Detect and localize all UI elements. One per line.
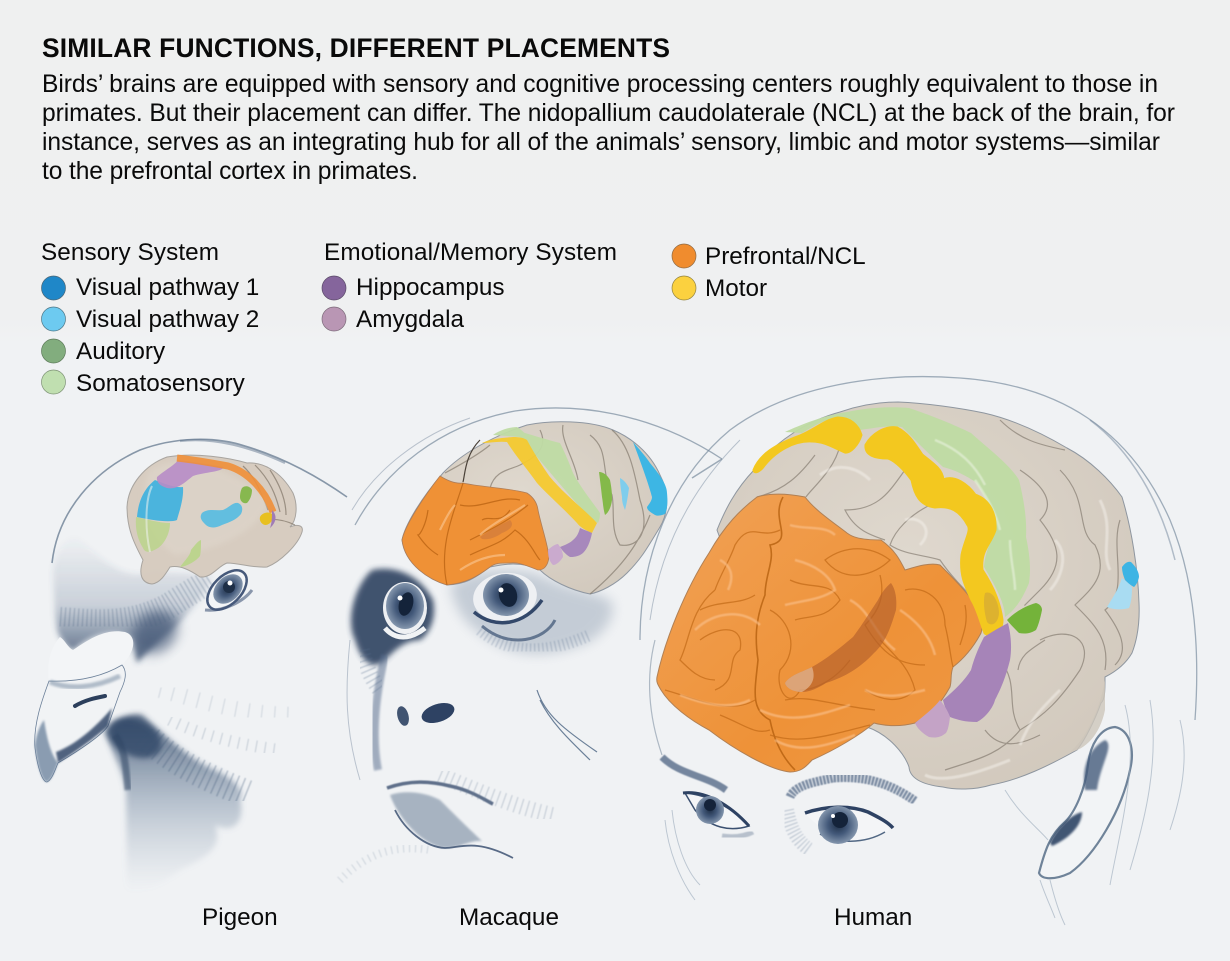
human right eye [787, 806, 893, 850]
hippocampus [157, 460, 224, 488]
somatosensory small [180, 540, 201, 567]
legend: emotional/memory system: Emotional/Memory System [324, 239, 617, 266]
macaque left eye [383, 582, 427, 637]
legend: prefrontal and motor [672, 243, 866, 302]
gyri lines [757, 420, 1122, 770]
legend: emotional/memory system: Amygdala [356, 306, 465, 333]
visual pathway 1 [633, 442, 667, 516]
hippocampus [943, 623, 1011, 722]
illustration: human face sketch [640, 377, 1197, 925]
visual pathway blue [137, 480, 183, 521]
visual pathway 2 [620, 478, 629, 510]
motor [260, 513, 273, 525]
illustration: macaque face sketch [340, 408, 722, 880]
visual pathway 2 [1107, 578, 1132, 609]
somatosensory [493, 427, 600, 523]
human ear [1039, 727, 1132, 878]
somatosensory [785, 407, 1030, 617]
auditory [599, 472, 612, 515]
legend: sensory system: Visual pathway 2 [76, 306, 259, 333]
title: SIMILAR FUNCTIONS, DIFFERENT PLACEMENTS [42, 33, 670, 63]
macaque left eye patch [351, 569, 434, 665]
macaque muzzle and mouth [340, 640, 597, 880]
prefrontal orange [402, 476, 549, 585]
legend: sensory system: Sensory System [41, 239, 219, 266]
auditory [1007, 603, 1042, 634]
beak [35, 665, 125, 782]
intro text block [42, 71, 1175, 185]
cerebellum folds [243, 465, 295, 525]
macaque nose [395, 699, 457, 727]
human left brow [662, 757, 726, 790]
legend: emotional/memory system: Hippocampus [356, 274, 505, 301]
somatosensory [136, 517, 170, 552]
brain outline [402, 422, 667, 594]
brain outline [127, 455, 302, 584]
intro text block: to the prefrontal cortex in primates. [42, 158, 418, 185]
human brain [657, 402, 1139, 789]
visual pathway 1 [1122, 562, 1139, 587]
human hair strands [665, 700, 1184, 925]
prefrontal arc [177, 458, 273, 512]
translucent cerebellum [1070, 680, 1105, 752]
visual pathway mid [201, 503, 242, 527]
illustration: pigeon head sketch [35, 439, 347, 891]
motor yellow [482, 437, 597, 533]
legend: sensory system: Auditory [76, 338, 166, 365]
species labels: Pigeon [202, 904, 278, 931]
amygdala [915, 700, 950, 738]
legend: sensory system [41, 239, 259, 397]
species labels [202, 904, 912, 931]
overlaid deep structure [785, 583, 896, 692]
hippocampus [560, 528, 592, 557]
intro text block: primates. But their placement can differ. The nidopallium caudolaterale (NCL) at the back of the brain, for [42, 100, 1175, 127]
brain sulci [445, 425, 650, 594]
amygdala [548, 544, 563, 565]
auditory [240, 486, 252, 503]
legend: sensory system: Visual pathway 1 [76, 274, 259, 301]
legend: emotional/memory system [322, 239, 617, 333]
species labels: Macaque [459, 904, 559, 931]
human left eye [683, 793, 753, 837]
gyri highlights [820, 467, 1110, 778]
macaque right eye area [450, 569, 613, 654]
legend: prefrontal and motor: Prefrontal/NCL [705, 243, 866, 270]
legend: sensory system: Somatosensory [76, 370, 246, 397]
cere [48, 631, 133, 681]
macaque brain [402, 422, 667, 594]
species labels: Human [834, 904, 912, 931]
human right brow [790, 778, 915, 801]
somatosensory highlight [935, 440, 1015, 590]
prefrontal orange [657, 494, 982, 772]
intro text block: Birds’ brains are equipped with sensory and cognitive processing centers roughly equivalent to those in [42, 71, 1158, 98]
brain outline [717, 402, 1139, 789]
neck and chest plumage [102, 690, 300, 891]
amygdala [270, 510, 276, 528]
pigeon eye [200, 563, 254, 617]
intro text block: instance, serves as an integrating hub for all of the animals’ sensory, limbic and motor systems—similar [42, 129, 1160, 156]
legend: prefrontal and motor: Motor [705, 275, 767, 302]
pigeon brain [127, 455, 302, 584]
motor yellow [754, 418, 1002, 635]
